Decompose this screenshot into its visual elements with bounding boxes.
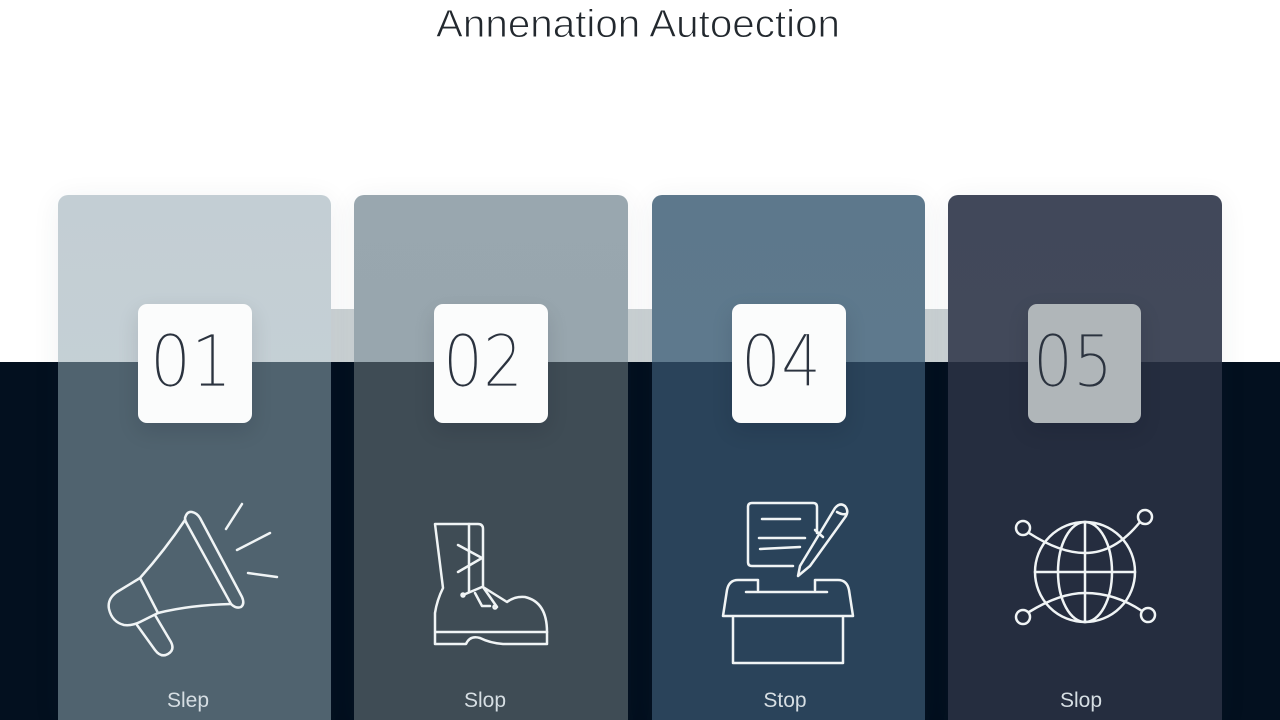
number badge 05: 05 [1033,320,1113,403]
icon: globe network [1014,508,1156,626]
dark band [0,362,1280,720]
panel: step 05 [948,195,1222,720]
panel lower: step 04 [652,362,925,720]
panel lower: step 02 [354,362,628,720]
panel: step 02 [354,195,628,720]
panel lower: step 01 [58,362,331,720]
panel: step 01 [58,195,331,720]
number badge 02 [434,304,548,423]
step label: Slep [167,689,209,712]
panel: step 04 [652,195,925,720]
number badge 04: 04 [741,320,821,403]
panel lower: step 05 [948,362,1222,720]
icon: ballot box with pen [722,502,854,664]
step label: Stop [763,689,807,712]
title: Annenation Autoection [436,3,840,46]
icon: megaphone [107,502,278,657]
number badge 04 [732,304,846,423]
number badge 01: 01 [150,320,232,403]
step label: Slop [1060,689,1102,712]
number badge 01 [138,304,252,423]
number badge 02: 02 [443,320,523,403]
icon: boot [434,522,548,646]
step label: Slop [464,689,506,712]
light connector strip [331,309,948,362]
number badge 05 [1028,304,1141,423]
